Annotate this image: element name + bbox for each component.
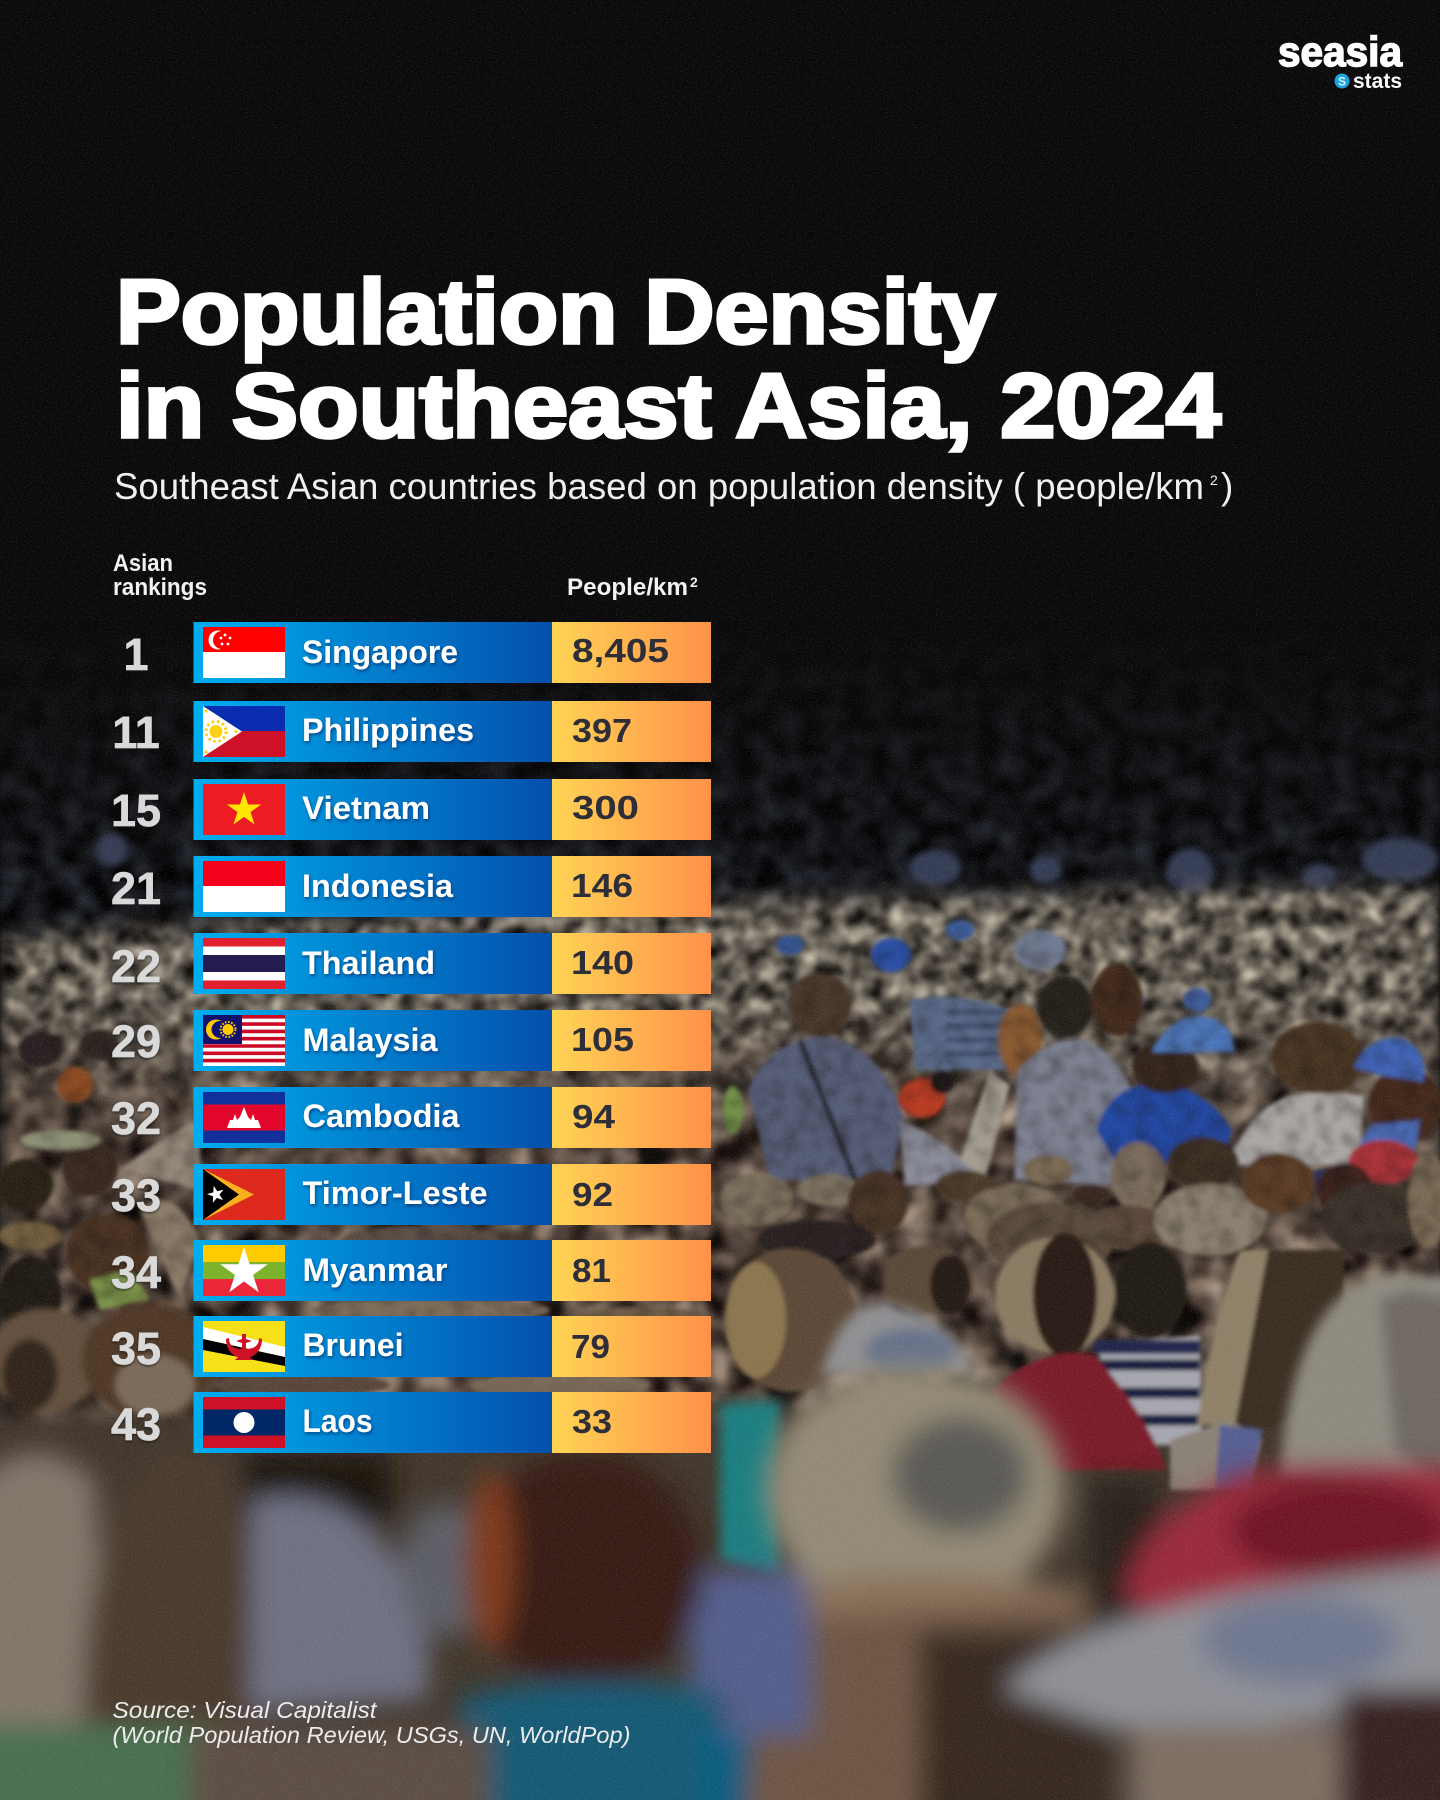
subtitle: ) [1221, 466, 1233, 507]
country name: Timor-Leste [302, 1175, 488, 1211]
flag: Timor-Leste [203, 1169, 285, 1220]
country name: Brunei [302, 1327, 404, 1363]
bar [194, 856, 552, 917]
value: 92 [572, 1176, 613, 1213]
title: Population Density [116, 262, 995, 363]
value: 300 [572, 789, 639, 826]
nearer head row [719, 1173, 793, 1227]
value cell [552, 1392, 711, 1453]
source note [112, 1697, 630, 1748]
value: 8,405 [572, 632, 669, 669]
value: 140 [571, 944, 634, 981]
rank: 33 [111, 1170, 161, 1221]
source note: Source: Visual Capitalist [112, 1697, 378, 1723]
flag: Thailand [203, 938, 285, 989]
left side people [57, 1067, 93, 1103]
rank: 1 [123, 629, 149, 680]
row: Singapore [123, 622, 711, 683]
row: Cambodia [111, 1087, 711, 1148]
dense crowd band [0, 860, 1440, 1440]
soft base of the foreground [0, 1410, 1440, 1800]
country name: Philippines [302, 712, 474, 748]
subtitle: 2 [1210, 472, 1218, 488]
country name: Singapore [302, 634, 458, 670]
value: 33 [572, 1403, 612, 1440]
large heads at lower left [0, 1302, 218, 1418]
bar [194, 622, 552, 683]
rank: 11 [112, 707, 160, 758]
row: Myanmar [111, 1240, 711, 1301]
column header: People/km2: 2 [690, 574, 698, 590]
value cell [552, 1010, 711, 1071]
bar [194, 779, 552, 840]
bar [194, 701, 552, 762]
value cell [552, 933, 711, 994]
bar [194, 1087, 552, 1148]
column header: Asian rankings: rankings [113, 574, 207, 601]
row: Brunei [111, 1316, 711, 1377]
country name: Myanmar [302, 1252, 448, 1288]
value cell [552, 622, 711, 683]
value cell [552, 1316, 711, 1377]
row: Thailand [111, 933, 711, 994]
flag: Myanmar [203, 1245, 285, 1296]
rank: 32 [111, 1093, 161, 1144]
distant dim crowd [0, 678, 1440, 940]
flag: Laos [203, 1397, 285, 1448]
value: 146 [571, 867, 633, 904]
logo: seasia stats: stats [1353, 70, 1402, 93]
column header: Asian rankings: Asian [113, 550, 173, 577]
row: Vietnam [111, 779, 711, 840]
column header: People/km2: People/km [567, 574, 688, 601]
bar [194, 933, 552, 994]
rank: 29 [111, 1016, 161, 1067]
heads between rows [570, 1306, 710, 1334]
bar [194, 1164, 552, 1225]
upper right near heads [724, 1233, 1345, 1490]
rank: 34 [111, 1247, 161, 1298]
country name: Vietnam [302, 790, 430, 826]
country name: Cambodia [302, 1098, 460, 1134]
source note: (World Population Review, USGs, UN, WorldPop) [112, 1722, 630, 1748]
value: 81 [572, 1252, 611, 1289]
rank: 15 [111, 785, 161, 836]
logo: seasia stats: seasia [1278, 28, 1403, 75]
column header: Asian rankings [113, 550, 207, 601]
value: 79 [571, 1328, 610, 1365]
flag: Philippines [203, 706, 285, 757]
value: 105 [571, 1021, 634, 1058]
rank: 35 [111, 1323, 161, 1374]
rank: 21 [111, 863, 161, 914]
flag: Vietnam [203, 784, 285, 835]
flag: Singapore [203, 627, 285, 678]
country name: Thailand [302, 945, 435, 981]
value cell [552, 1164, 711, 1225]
value cell [552, 701, 711, 762]
flag: Cambodia [203, 1092, 285, 1143]
value: 94 [572, 1098, 616, 1135]
title: in Southeast Asia, 2024 [116, 356, 1221, 457]
foreground blurred people [720, 1275, 1440, 1576]
bar [194, 1240, 552, 1301]
bar [194, 1316, 552, 1377]
rank: 43 [111, 1399, 161, 1450]
logo: seasia stats: S [1338, 74, 1346, 88]
row: Philippines [112, 701, 711, 762]
midground people [0, 920, 1440, 1397]
value cell [552, 856, 711, 917]
faint blue figures in the distance [96, 834, 1438, 896]
bar [194, 1010, 552, 1071]
value cell [552, 779, 711, 840]
bar [194, 1392, 552, 1453]
country name: Indonesia [302, 868, 453, 904]
value cell [552, 1087, 711, 1148]
flag: Indonesia [203, 861, 285, 912]
row: Timor-Leste [111, 1164, 711, 1225]
value cell [552, 1240, 711, 1301]
flag: Brunei [203, 1321, 285, 1372]
subtitle: Southeast Asian countries based on population density ( people/km [114, 466, 1204, 507]
row: Indonesia [111, 856, 711, 917]
flag: Malaysia [203, 1015, 285, 1066]
country name: Malaysia [302, 1022, 438, 1058]
row: Malaysia [111, 1010, 711, 1071]
dark mottling over midground [0, 916, 1440, 1378]
country name: Laos [302, 1403, 372, 1439]
title [116, 262, 1221, 457]
value: 397 [572, 712, 632, 749]
rank: 22 [111, 941, 161, 992]
row: Laos [111, 1392, 711, 1453]
